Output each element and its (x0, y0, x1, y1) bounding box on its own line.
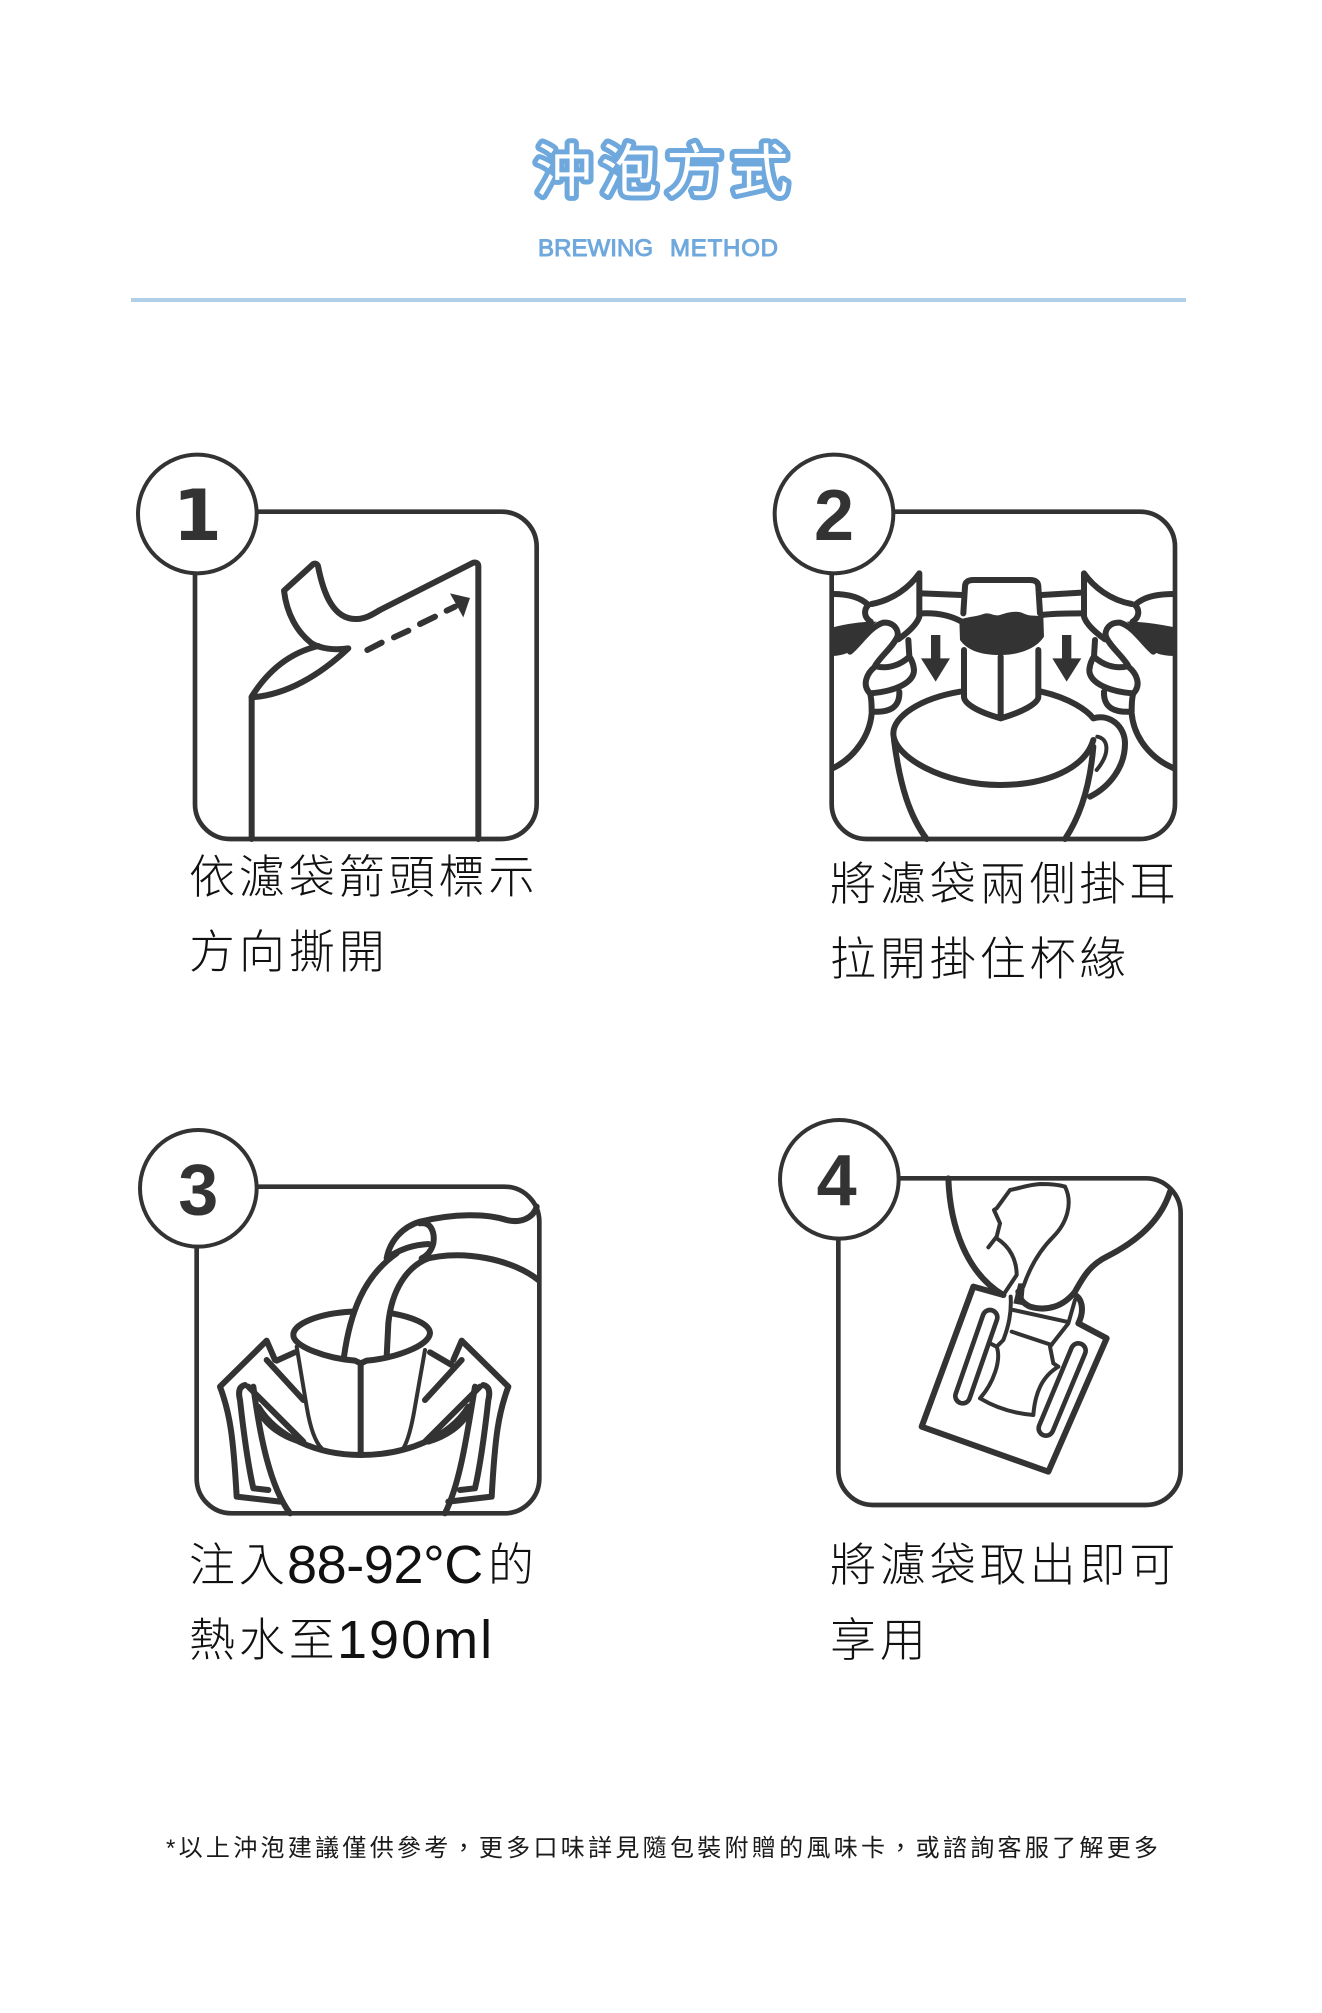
filter bag (293, 1312, 430, 1453)
panel: step 3 (140, 1130, 539, 1513)
caption step 3: 的 (488, 1539, 538, 1591)
fingers (948, 1178, 1170, 1309)
caption step 2: 將濾袋兩側掛耳 (830, 858, 1179, 910)
header divider (131, 298, 1186, 302)
caption step 3: 熱水至 (189, 1614, 339, 1666)
caption step 3 (189, 1535, 538, 1670)
icon: removing filter bag (922, 1178, 1170, 1472)
number badge 2 (775, 455, 893, 573)
title: 沖泡方式 (535, 140, 797, 204)
panel frame (197, 1187, 539, 1513)
cup (893, 692, 1125, 839)
number badge 1: 1 (173, 474, 222, 557)
number badge 1 (138, 455, 257, 573)
icon: pouring water into bag (220, 1207, 538, 1513)
left ear (220, 1341, 303, 1502)
icon: hands hanging bag on cup (833, 573, 1175, 839)
subtitle: METHOD (670, 235, 778, 262)
number badge 4: 4 (817, 1141, 857, 1221)
footnote: *以上沖泡建議僅供參考，更多口味詳見隨包裝附贈的風味卡，或諮詢客服了解更多 (166, 1835, 1158, 1862)
panel: step 2 (775, 455, 1175, 839)
subtitle (538, 235, 778, 262)
panel: step 1 (138, 455, 537, 839)
caption step 1: 方向撕開 (189, 926, 389, 978)
caption step 3: 88-92°C (287, 1535, 483, 1595)
right hand (1084, 573, 1175, 768)
caption step 4: 享用 (830, 1614, 930, 1666)
number badge 2: 2 (814, 476, 854, 556)
panel frame (838, 1178, 1181, 1505)
panel: step 4 (780, 1120, 1181, 1505)
panel frame (195, 512, 537, 839)
caption step 1 (189, 851, 538, 978)
bag (922, 1287, 1107, 1472)
subtitle: BREWING (538, 235, 653, 262)
panel frame (832, 512, 1175, 839)
number badge 3 (140, 1130, 257, 1247)
caption step 4 (830, 1539, 1179, 1666)
filter bag (959, 580, 1044, 718)
caption step 4: 將濾袋取出即可 (830, 1539, 1179, 1591)
left hand (833, 573, 919, 768)
hook strips (922, 593, 1082, 622)
caption step 2: 拉開掛住杯緣 (830, 933, 1129, 985)
caption step 3: 190ml (337, 1610, 494, 1670)
coffee pouch (980, 1297, 1075, 1415)
number badge 3: 3 (178, 1150, 218, 1230)
caption step 3: 注入 (189, 1539, 289, 1591)
kettle and water (344, 1207, 538, 1357)
icon: torn drip bag (252, 562, 478, 839)
slots (963, 1317, 1078, 1428)
number badge 4 (780, 1120, 899, 1239)
cup (253, 1352, 475, 1513)
caption step 2 (830, 858, 1179, 985)
right ear (425, 1341, 508, 1502)
caption step 1: 依濾袋箭頭標示 (189, 851, 538, 903)
arrows (921, 635, 1081, 682)
